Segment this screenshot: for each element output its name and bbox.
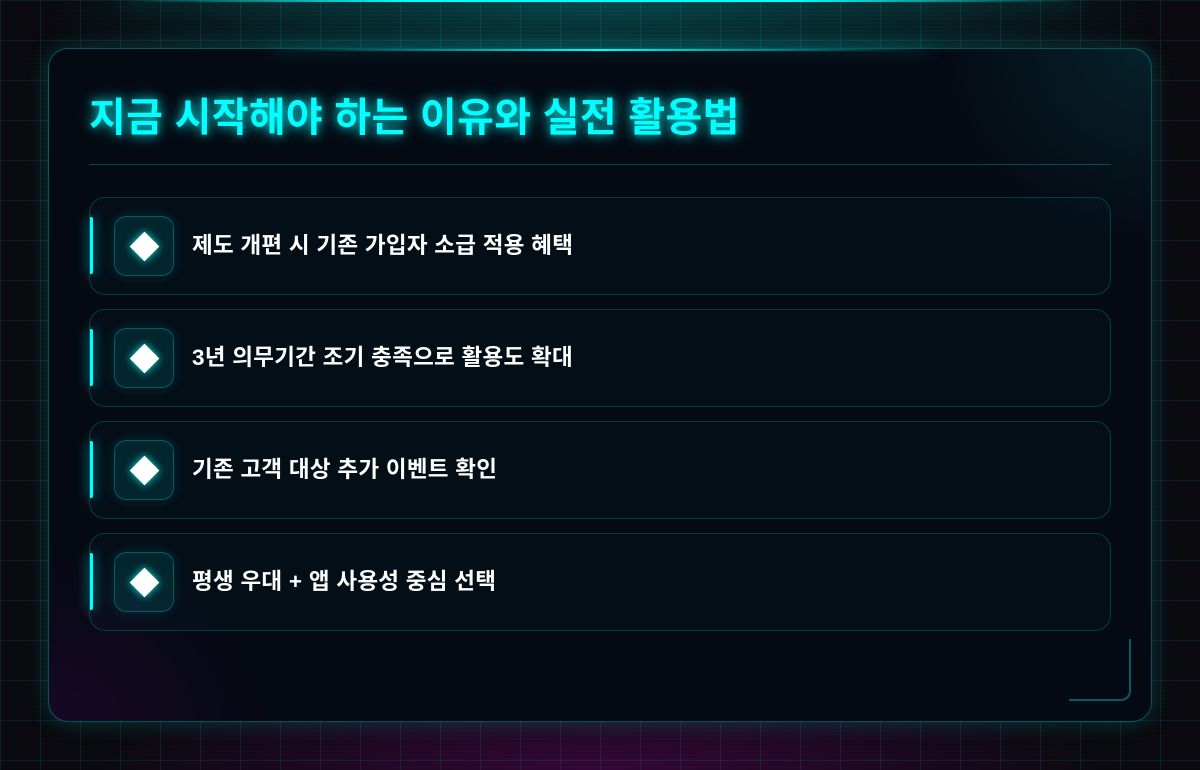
accent bar 4 [90, 553, 93, 610]
text 1: 제도 개편 시 기존 가입자 소급 적용 혜택 [192, 233, 573, 258]
text 2: 3년 의무기간 조기 충족으로 활용도 확대 [192, 345, 573, 370]
top glowing bar [120, 0, 1080, 2]
icon: diamond 3 [114, 440, 174, 500]
icon: diamond 2 [114, 328, 174, 388]
accent bar 2 [90, 329, 93, 386]
card top glowing bar [268, 49, 932, 51]
list item 2 [89, 309, 1111, 407]
list item 1 [89, 197, 1111, 295]
accent bar 3 [90, 441, 93, 498]
list item 4 [89, 533, 1111, 631]
icon: diamond 4 [114, 552, 174, 612]
title: 지금 시작해야 하는 이유와 실전 활용법 [89, 96, 740, 140]
corner bracket [1069, 639, 1131, 701]
text 3: 기존 고객 대상 추가 이벤트 확인 [192, 457, 497, 482]
icon: diamond 1 [114, 216, 174, 276]
text 4: 평생 우대 + 앱 사용성 중심 선택 [192, 569, 496, 594]
accent bar 1 [90, 217, 93, 274]
list item 3 [89, 421, 1111, 519]
